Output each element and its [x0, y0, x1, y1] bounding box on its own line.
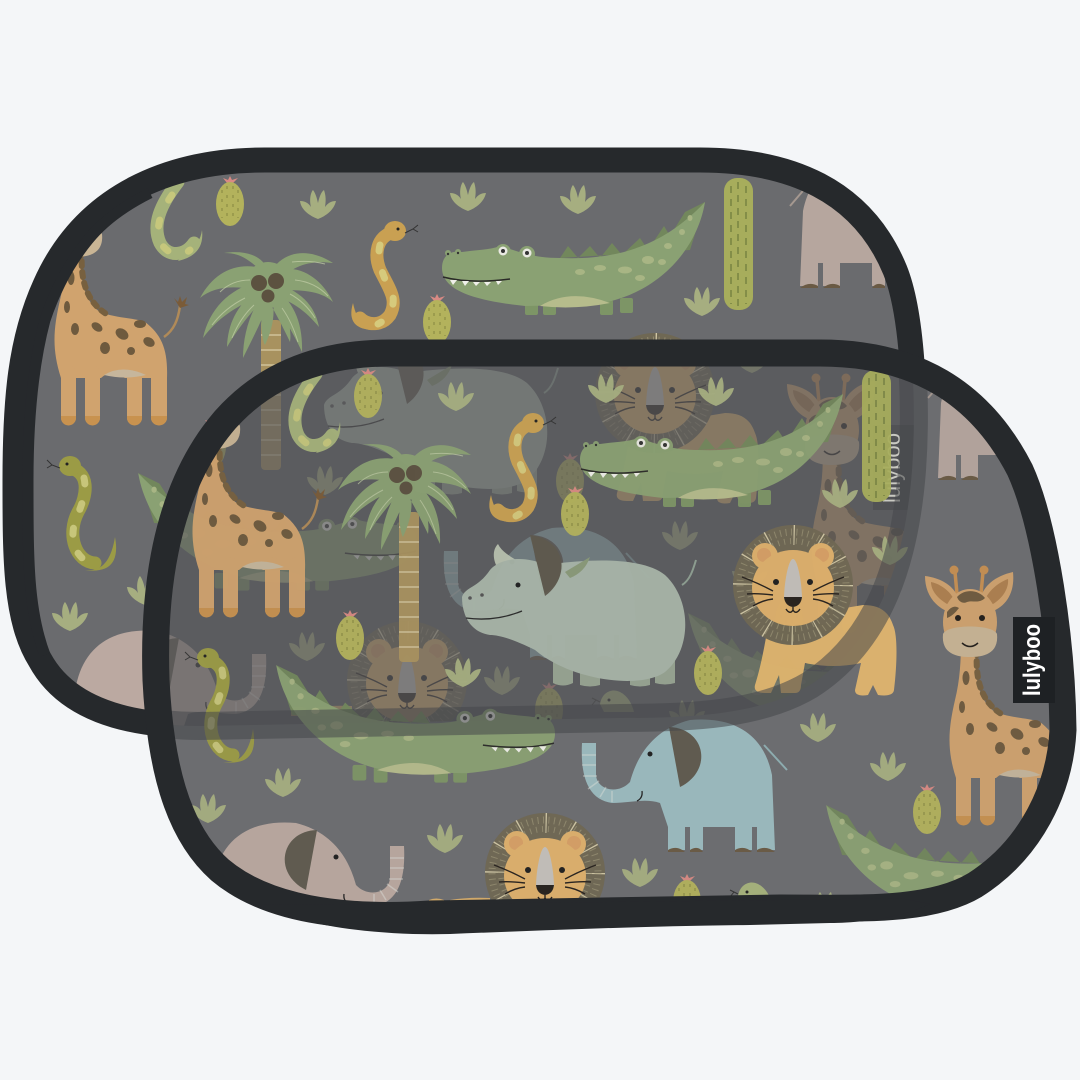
front print [184, 368, 1050, 902]
back border seen through [172, 378, 928, 740]
back print seen through [169, 366, 904, 726]
front shade black border [156, 353, 1063, 915]
brand tag: lulyboo [1019, 624, 1046, 696]
back label seen through: lulyboo [879, 433, 905, 503]
back shade print [3, 176, 905, 710]
overlap with back shade [169, 366, 914, 722]
panel: front sun shade [142, 340, 1076, 934]
back border thick left edge [28, 193, 150, 655]
back shade black border [15, 160, 914, 726]
panel: back sun shade [15, 155, 993, 763]
print and overlap [169, 366, 1050, 902]
back shade mesh [15, 160, 914, 726]
front border thick bottom edge [260, 898, 930, 934]
back label seen through [873, 425, 905, 510]
brand tag [1013, 617, 1055, 703]
front shade mesh [156, 353, 1063, 915]
product image: two safari sun shades [2, 148, 1076, 934]
